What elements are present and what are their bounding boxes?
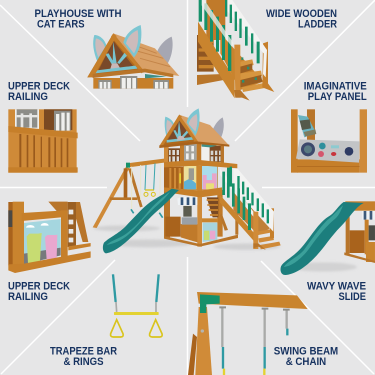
heading: imaginative play panel: IMAGINATIVE: [304, 80, 367, 92]
heading: swing beam & chain: & CHAIN: [286, 356, 326, 368]
illustration: picture panel: [8, 202, 91, 273]
heading: swing beam & chain: SWING BEAM: [274, 345, 338, 357]
heading: upper deck railing: [8, 281, 70, 303]
illustration: stairs: [197, 0, 274, 101]
heading: upper deck railing: UPPER DECK: [8, 80, 70, 92]
heading: wide wooden ladder: [266, 8, 337, 30]
heading: trapeze bar & rings: TRAPEZE BAR: [50, 345, 117, 357]
illustration: slide closeup: [280, 201, 375, 275]
panel: swing beam and chain: [188, 292, 338, 375]
heading: trapeze bar & rings: [50, 345, 117, 368]
panel: upper deck railing (bottom picture panel): [8, 202, 91, 303]
tower mid and upper levels: [164, 143, 237, 197]
heading: upper deck railing: RAILING: [8, 291, 48, 303]
tower lower structure: [164, 189, 238, 247]
ground shadows: [93, 225, 280, 250]
heading: wavy wave slide: [307, 281, 366, 303]
panel: wavy wave slide: [280, 201, 375, 303]
illustration: trapeze: [111, 274, 162, 337]
heading: imaginative play panel: [304, 80, 367, 103]
heading: trapeze bar & rings: & RINGS: [64, 356, 104, 368]
heading: wide wooden ladder: WIDE WOODEN: [266, 8, 337, 20]
panel: upper deck railing (top): [8, 80, 78, 173]
panel: trapeze bar and rings: [50, 274, 162, 368]
panel: wide wooden ladder: [197, 0, 337, 101]
heading: upper deck railing: UPPER DECK: [8, 281, 70, 293]
illustration: control panel: [291, 109, 367, 173]
heading: upper deck railing: RAILING: [8, 91, 48, 103]
heading: wavy wave slide: SLIDE: [338, 291, 366, 303]
heading: imaginative play panel: PLAY PANEL: [308, 91, 367, 103]
heading: upper deck railing: [8, 80, 70, 103]
heading: wide wooden ladder: LADDER: [298, 18, 337, 30]
panel: playhouse with cat ears: [34, 8, 179, 89]
wavy slide: [103, 189, 179, 253]
illustration: swing beam: [188, 292, 308, 375]
heading: swing beam & chain: [274, 345, 338, 368]
cat-ear roof: [159, 108, 229, 148]
swing set: [93, 159, 164, 228]
illustration: railing closeup: [8, 109, 78, 173]
wide wooden staircase: [220, 167, 281, 250]
panel: imaginative play panel: [291, 80, 367, 173]
heading: playhouse with cat ears: CAT EARS: [37, 18, 84, 30]
illustration: cat-ear roof: [87, 25, 179, 89]
heading: playhouse with cat ears: [34, 8, 122, 30]
main illustration: playset: [93, 108, 281, 253]
heading: playhouse with cat ears: PLAYHOUSE WITH: [34, 8, 122, 20]
heading: wavy wave slide: WAVY WAVE: [307, 281, 366, 293]
